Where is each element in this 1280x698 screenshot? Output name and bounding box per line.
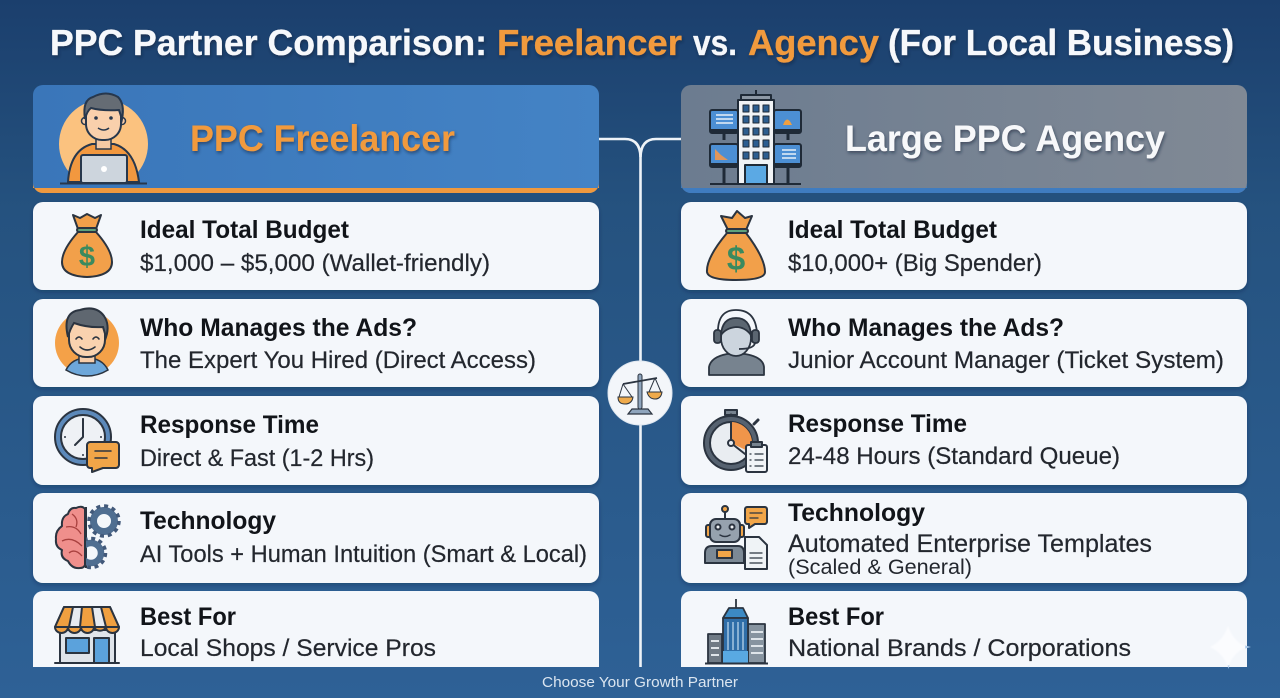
text: best for: Local Shops / Service Pros xyxy=(140,635,436,662)
card: ideal total budget xyxy=(33,202,599,290)
icon: robot and document xyxy=(705,506,767,569)
title: PPC Partner Comparison: xyxy=(50,22,487,63)
text: technology: Technology xyxy=(788,499,925,527)
heading: PPC Freelancer: PPC Freelancer xyxy=(190,118,455,159)
icon: support agent headset xyxy=(709,310,764,375)
card: best for xyxy=(33,591,599,667)
title: vs. xyxy=(693,22,737,63)
card: response time xyxy=(33,396,599,485)
text: technology xyxy=(140,507,587,568)
card: technology xyxy=(33,493,599,583)
panel: freelancer column xyxy=(33,85,599,667)
text: technology: AI Tools + Human Intuition (Smart & Local) xyxy=(140,541,587,568)
icon: big money bag: $ xyxy=(727,240,745,277)
text: budget: Ideal Total Budget xyxy=(140,216,350,244)
text: budget: $10,000+ (Big Spender) xyxy=(788,250,1042,277)
text: response xyxy=(788,410,1120,470)
header: Large PPC Agency xyxy=(681,85,1247,193)
text: best for: Best For xyxy=(140,603,236,631)
text: response: Direct & Fast (1-2 Hrs) xyxy=(140,445,374,472)
icon: brain and gears xyxy=(56,506,119,568)
text: best for: National Brands / Corporations xyxy=(788,635,1131,662)
card: who manages xyxy=(33,299,599,387)
text: budget: $1,000 – $5,000 (Wallet-friendly) xyxy=(140,250,490,277)
title: Freelancer xyxy=(497,22,682,63)
text: who manages: Who Manages the Ads? xyxy=(788,314,1064,342)
card: best for xyxy=(681,591,1247,667)
decorative sparkle xyxy=(1210,626,1251,669)
icon: clock with chat xyxy=(55,409,119,472)
icon: big money bag xyxy=(707,211,765,280)
icon: freelancer at laptop xyxy=(59,94,148,188)
icon: stopwatch with checklist xyxy=(704,410,767,472)
footer caption: Choose Your Growth Partner xyxy=(542,675,738,691)
text: who manages: The Expert You Hired (Direct Access) xyxy=(140,347,536,374)
card: who manages xyxy=(681,299,1247,387)
card: ideal total budget xyxy=(681,202,1247,290)
text: response: Response Time xyxy=(140,411,319,439)
text: best for xyxy=(788,603,1131,662)
icon: storefront xyxy=(55,607,119,663)
text: best for: Best For xyxy=(788,603,884,631)
header: PPC Freelancer xyxy=(33,85,599,193)
heading: Large PPC Agency: Large PPC Agency xyxy=(845,118,1165,159)
text: who manages xyxy=(788,314,1224,374)
text: technology: Automated Enterprise Templates xyxy=(788,530,1152,558)
icon: expert face xyxy=(55,308,119,376)
icon: corporate towers xyxy=(705,599,768,664)
text: budget xyxy=(788,216,1042,277)
card: technology xyxy=(681,493,1247,583)
card: response time xyxy=(681,396,1247,485)
text: technology: (Scaled & General) xyxy=(788,555,972,579)
text: best for xyxy=(140,603,436,662)
text: response: Response Time xyxy=(788,410,967,438)
title: (For Local Business) xyxy=(888,22,1234,63)
text: technology xyxy=(788,499,1152,579)
text: response: 24-48 Hours (Standard Queue) xyxy=(788,443,1120,470)
panel: agency column xyxy=(681,85,1247,667)
center connector xyxy=(599,139,681,667)
text: who manages: Who Manages the Ads? xyxy=(140,314,417,342)
text: who manages: Junior Account Manager (Ticket System) xyxy=(788,347,1224,374)
icon: money bag xyxy=(62,214,112,277)
text: response xyxy=(140,411,374,472)
text: who manages xyxy=(140,314,536,374)
text: technology: Technology xyxy=(140,507,276,535)
text: budget xyxy=(140,216,490,277)
title: Agency xyxy=(748,22,879,63)
icon: money bag: $ xyxy=(79,241,95,273)
icon: office tower with screens xyxy=(710,90,801,184)
icon: balance scale xyxy=(608,361,672,425)
text: budget: Ideal Total Budget xyxy=(788,216,998,244)
